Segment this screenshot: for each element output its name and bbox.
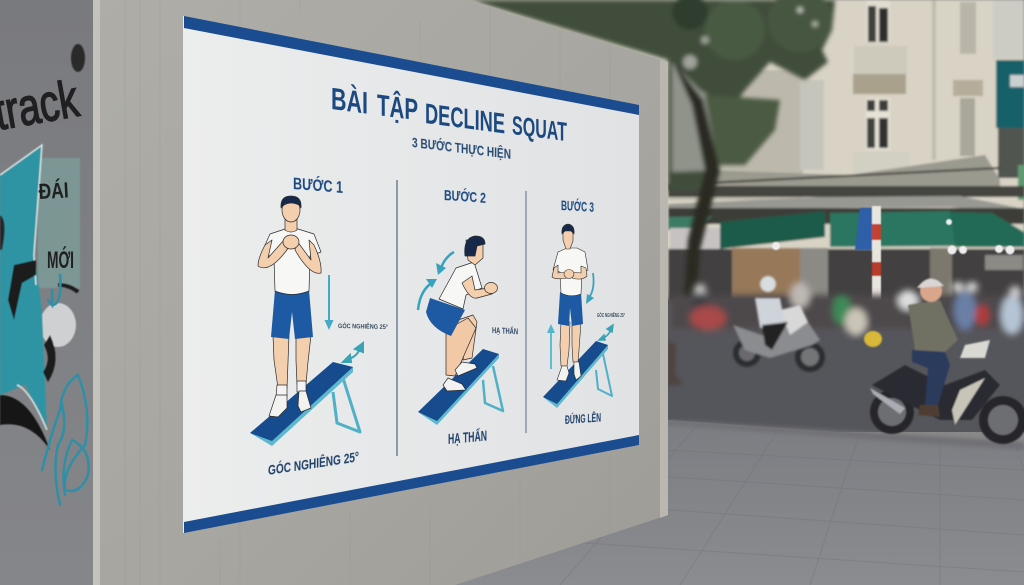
step 3 figure [543,224,612,408]
motorbike: foreground rider [870,278,1024,444]
hands [283,235,299,249]
building facade [460,0,1024,309]
motorbike: mid-distance rider [733,276,825,372]
street lights and pole [772,206,1014,336]
head [466,240,483,265]
legs [273,335,289,388]
yellow barrier base [864,331,882,347]
step 3 panel [543,198,625,427]
graffiti words [38,177,74,274]
bench [250,362,360,446]
step 1 figure [250,196,360,446]
shorts [558,292,583,326]
arms [258,240,289,268]
subtitle: 3 BƯỚC THỰC HIỆN [412,135,511,162]
up arrow [547,324,555,369]
tree [470,0,835,300]
step 1 panel [250,174,388,478]
street background photo [440,0,1024,585]
graffiti blue tag [42,275,89,505]
small angle label: GÓC NGHIÊNG 25° [597,311,625,319]
shoes [557,366,569,381]
graffiti words: ĐÁI [38,177,69,204]
road [660,322,1024,432]
bench [418,349,503,425]
head [563,228,573,249]
shorts [271,290,313,339]
step 2 caption: HẠ THẤN [448,428,487,448]
step 2 heading: BƯỚC 2 [444,186,486,207]
shorts [426,298,465,336]
hands [564,270,574,278]
down curved arrow [586,273,594,304]
title: DECLINE [425,98,505,140]
bench [543,341,612,408]
arm [462,276,495,298]
lit wall edge [660,60,668,518]
front leg [446,318,476,376]
pedestrian foot at wall edge [668,340,684,386]
angle arrow [599,325,613,340]
step 2 panel [418,186,518,448]
hands [484,282,498,294]
small angle label: GÓC NGHIÊNG 25° [338,321,388,331]
shoes [443,378,466,391]
graffiti words: MỚI [47,246,74,274]
title: BÀI [331,81,368,121]
title: TẬP [377,88,418,127]
divider lines [397,180,526,456]
top blue band [184,16,639,115]
shirt [262,229,321,294]
step 2 figure [418,236,503,425]
bottom blue band [184,435,639,533]
hair [562,224,574,234]
crowd [670,282,1024,336]
step 3 caption: ĐỨNG LÊN [565,409,601,427]
title: SQUAT [512,110,567,147]
small action label: HẠ THẤN [492,325,518,336]
step 1 heading: BƯỚC 1 [293,174,343,197]
hair [281,196,301,208]
title [331,81,567,147]
legs [560,322,570,366]
down arrow [324,275,334,330]
back leg [452,315,477,360]
neck [285,218,297,232]
concrete wall [93,0,668,585]
poster white sheet [183,16,639,533]
step 3 heading: BƯỚC 3 [561,198,594,215]
poster board [183,16,639,533]
head [282,198,300,222]
paving [440,420,1024,585]
step 1 caption: GÓC NGHIÊNG 25° [268,447,359,478]
graffiti pillar [0,0,93,585]
graffiti dot [71,44,85,72]
shirt [439,262,482,309]
socks and shoes [276,385,287,397]
motion arrows [418,252,454,310]
shirt [553,248,588,296]
graffiti paint [0,145,80,450]
hair [465,236,485,256]
angle arrow [343,343,363,362]
arms [552,265,567,279]
